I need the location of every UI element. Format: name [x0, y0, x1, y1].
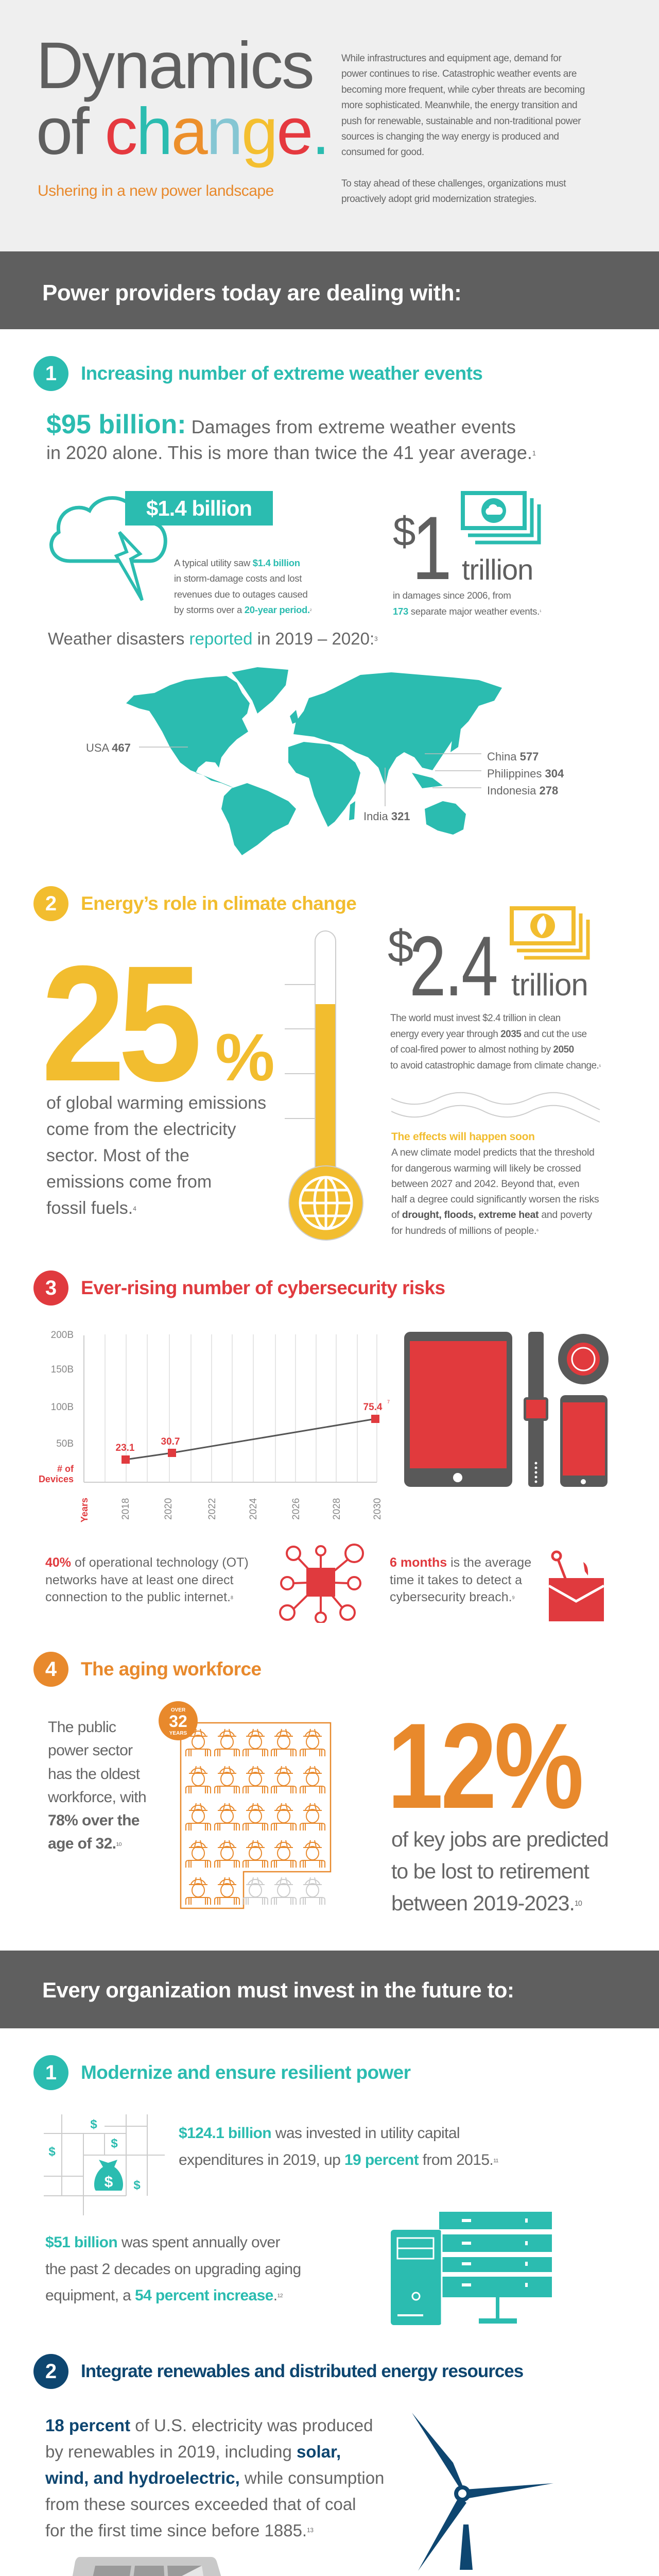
workforce grid: OVER: [171, 1707, 186, 1713]
section 1 heading: [33, 356, 482, 391]
text: $1 trillion detail: 173 separate major weather events.1: [393, 606, 541, 616]
icon: money grid: $: [105, 2174, 113, 2191]
banner: every organization: [0, 1951, 659, 2028]
text: 6 months: [390, 1555, 531, 1604]
icon: network: [279, 1544, 364, 1623]
line chart: connected devices: 100B: [51, 1402, 74, 1413]
workforce grid: YEARS: [169, 1731, 187, 1736]
workforce grid: [159, 1701, 332, 1909]
text: invest: of coal-fired power to almost nothing by 2050: [390, 1044, 574, 1055]
part 2 section 2 heading: Integrate renewables and distributed energy resources: [81, 2361, 523, 2381]
stat: $2.4 trillion: trillion: [511, 968, 588, 1002]
line chart: connected devices: 200B: [51, 1330, 74, 1341]
world map: [126, 667, 502, 855]
text: emissions: fossil fuels.4: [46, 1198, 136, 1218]
text: $51 billion: $51 billion was spent annually over: [45, 2234, 280, 2251]
text: 40% OT: [45, 1555, 249, 1604]
text: effects soon: half a degree could significantly worsen the risks: [391, 1194, 599, 1205]
text: invest: energy every year through 2035 and cut the use: [390, 1029, 587, 1040]
text: 18 percent: 18 percent of U.S. electricity was produced: [45, 2416, 373, 2435]
text: oldest workforce: 78% over the: [48, 1812, 140, 1829]
text: effects soon: [391, 1131, 599, 1236]
icon: thermometer: [285, 930, 363, 1241]
text: $124.1 billion: [179, 2125, 498, 2168]
stat: 25%: %: [215, 1020, 275, 1095]
section 3 heading: 3: [45, 1277, 57, 1299]
line chart: connected devices: 50B: [56, 1438, 74, 1449]
text: effects soon: of drought, floods, extreme heat and poverty: [391, 1209, 592, 1221]
text: effects soon: The effects will happen soon: [391, 1131, 535, 1143]
callout: $1.4 billion: [125, 491, 273, 526]
text: emissions: emissions come from: [46, 1172, 212, 1192]
text: key jobs: of key jobs are predicted: [391, 1827, 609, 1851]
text: effects soon: for dangerous warming will likely be crossed: [391, 1163, 581, 1174]
line chart: connected devices: 2028: [332, 1498, 342, 1520]
map labels: Asia: [487, 750, 564, 797]
section 4 heading: The aging workforce: [81, 1658, 261, 1680]
text: invest: The world must invest $2.4 trillion in clean: [390, 1013, 561, 1024]
text: key jobs: between 2019-2023.10: [391, 1891, 582, 1915]
stat: 25%: 25: [41, 931, 195, 1115]
text: emissions: sector. Most of the: [46, 1146, 189, 1165]
intro text: more sophisticated. Meanwhile, the energy transition and: [341, 100, 577, 111]
line chart: connected devices: 2024: [248, 1498, 259, 1520]
stat: 25%: [41, 931, 275, 1115]
icon: storm cloud: [49, 496, 167, 601]
text: 18 percent: [45, 2412, 384, 2544]
icon: phishing envelope: [549, 1551, 604, 1621]
map label: USA: USA 467: [86, 741, 131, 754]
line chart: connected devices: 7: [387, 1399, 390, 1404]
text: utility storm cost: revenues due to outages caused: [174, 589, 307, 600]
line chart: connected devices: 150B: [51, 1364, 74, 1375]
intro text: While infrastructures and equipment age, demand for: [341, 53, 561, 64]
section 3 heading: [33, 1270, 445, 1306]
text: utility storm cost: in storm-damage costs and lost: [174, 573, 302, 584]
icon: waves: [391, 1092, 600, 1123]
text: 6 months: time it takes to detect a: [390, 1572, 522, 1587]
section 3 heading: Ever-rising number of cybersecurity risks: [81, 1277, 445, 1298]
map labels: Asia: China 577: [487, 750, 539, 763]
$95 billion statement: [46, 410, 536, 463]
stat: $1 trillion: 1: [412, 498, 452, 599]
text: oldest workforce: age of 32.10: [48, 1835, 122, 1852]
icon: money grid: $: [111, 2137, 118, 2150]
line chart: connected devices: 75.4: [363, 1402, 383, 1413]
text: 40% OT: networks have at least one direct: [45, 1572, 233, 1587]
title: Dynamics: [36, 29, 313, 103]
line chart: connected devices: [39, 1330, 390, 1522]
text: 18 percent: from these sources exceeded that of coal: [45, 2495, 356, 2514]
text: $51 billion: equipment, a 54 percent increase.12: [45, 2287, 283, 2304]
map labels: Asia: Indonesia 278: [487, 784, 558, 797]
text: utility storm cost: [174, 557, 312, 615]
icon: money yellow: [510, 906, 590, 959]
intro text: [341, 53, 585, 158]
line chart: connected devices: 23.1: [116, 1443, 135, 1453]
stat: $2.4 trillion: [388, 919, 588, 1013]
text: utility storm cost: A typical utility saw $1.4 billion: [174, 557, 300, 568]
title: [36, 29, 328, 168]
text: oldest workforce: power sector: [48, 1742, 133, 1759]
section 2 heading: 2: [45, 892, 57, 915]
text: 18 percent: by renewables in 2019, including solar,: [45, 2442, 341, 2461]
workforce grid: 32: [169, 1712, 187, 1731]
text: 6 months: 6 months is the average: [390, 1555, 531, 1570]
icon: money grid: $: [48, 2145, 56, 2159]
stat: 12%: 12%: [387, 1698, 581, 1834]
line chart: connected devices: 2022: [207, 1498, 218, 1520]
text: 18 percent: wind, and hydroelectric, while consumption: [45, 2468, 384, 2487]
line chart: connected devices: 2020: [163, 1498, 174, 1520]
text: $124.1 billion: $124.1 billion was invested in utility capital: [179, 2125, 460, 2142]
icon: server: [391, 2212, 552, 2325]
stat: $2.4 trillion: 2.4: [409, 919, 497, 1013]
intro text 2: [341, 178, 566, 205]
icon: money grid: $: [133, 2178, 141, 2192]
text: invest: [390, 1013, 601, 1071]
text: effects soon: A new climate model predicts that the threshold: [391, 1147, 595, 1158]
text: emissions: come from the electricity: [46, 1120, 236, 1139]
text: $51 billion: [45, 2234, 301, 2304]
text: $51 billion: the past 2 decades on upgrading aging: [45, 2261, 301, 2277]
line chart: connected devices: Devices: [39, 1474, 74, 1484]
title: of change.: [36, 95, 328, 168]
text: oldest workforce: The public: [48, 1719, 116, 1736]
icon: money teal: [461, 491, 541, 544]
intro text: sources is changing the way energy is produced and: [341, 131, 559, 142]
callout: $1.4 billion: $1.4 billion: [146, 496, 252, 520]
section 2 heading: [33, 886, 356, 921]
text: emissions: of global warming emissions: [46, 1093, 266, 1113]
section 2 heading: Energy’s role in climate change: [81, 893, 356, 914]
intro text: becoming more frequent, while cyber threats are becoming: [341, 84, 585, 95]
text: oldest workforce: [48, 1719, 146, 1852]
map labels: Asia: Philippines 304: [487, 767, 564, 780]
line chart: connected devices: 2018: [120, 1498, 131, 1520]
line chart: connected devices: 2030: [372, 1498, 383, 1520]
part 2 section 1 heading: [33, 2055, 411, 2090]
intro text: consumed for good.: [341, 147, 424, 158]
line chart: connected devices: # of: [57, 1464, 74, 1474]
line chart: connected devices: 2026: [291, 1498, 302, 1520]
icon: money grid: [44, 2114, 165, 2215]
text: $124.1 billion: expenditures in 2019, up 19 percent from 2015.11: [179, 2151, 498, 2168]
text: key jobs: to be lost to retirement: [391, 1859, 589, 1883]
text: utility storm cost: by storms over a 20-year period.2: [174, 604, 311, 615]
part 2 section 1 heading: 1: [45, 2061, 57, 2084]
part 2 section 2 heading: [33, 2354, 626, 2389]
map heading: Weather disasters reported in 2019 – 2020:3: [48, 629, 378, 648]
$95 billion statement: $95 billion: Damages from extreme weather events: [46, 410, 516, 439]
intro text: power continues to rise. Catastrophic weather events are: [341, 69, 577, 79]
icon: wind turbine: [407, 2409, 561, 2573]
icon: devices: [404, 1332, 609, 1487]
subtitle: Ushering in a new power landscape: [38, 182, 274, 199]
$95 billion statement: in 2020 alone. This is more than twice the 41 year average.1: [46, 442, 536, 463]
section 1 heading: Increasing number of extreme weather events: [81, 363, 482, 384]
icon: money grid: $: [90, 2117, 97, 2131]
text: 40% OT: connection to the public internet.8: [45, 1590, 233, 1604]
banner: power providers: [0, 251, 659, 329]
text: oldest workforce: has the oldest: [48, 1766, 140, 1783]
stat: $1 trillion: [393, 498, 533, 599]
banner: every organization: Every organization must invest in the future to:: [42, 1978, 514, 2002]
text: $1 trillion detail: in damages since 2006, from: [393, 590, 511, 601]
text: invest: to avoid catastrophic damage from climate change.5: [390, 1060, 601, 1071]
text: 6 months: cybersecurity breach.9: [390, 1590, 514, 1604]
text: oldest workforce: workforce, with: [48, 1789, 146, 1806]
text: effects soon: for hundreds of millions of people.6: [391, 1225, 539, 1236]
intro text: push for renewable, sustainable and non-traditional power: [341, 116, 581, 127]
text: 40% OT: 40% of operational technology (OT): [45, 1555, 249, 1570]
line chart: connected devices: Years: [79, 1498, 90, 1522]
part 2 section 2 heading: 2: [45, 2360, 57, 2383]
icon: solar panel: [57, 2555, 245, 2576]
banner: power providers: Power providers today are dealing with:: [42, 280, 461, 306]
intro text 2: To stay ahead of these challenges, organizations must: [341, 178, 566, 189]
stat: $1 trillion: $: [393, 509, 416, 554]
header background: [0, 0, 659, 251]
text: key jobs: [391, 1827, 609, 1915]
stat: $1 trillion: trillion: [462, 553, 533, 586]
line chart: connected devices: 30.7: [161, 1436, 180, 1447]
intro text 2: proactively adopt grid modernization strategies.: [341, 194, 536, 205]
section 1 heading: 1: [45, 362, 57, 385]
map label: India: India 321: [363, 810, 410, 823]
stat: $2.4 trillion: $: [388, 921, 413, 973]
section 4 heading: 4: [45, 1658, 57, 1681]
text: $1 trillion detail: [393, 590, 542, 617]
text: 18 percent: for the first time since before 1885.13: [45, 2521, 314, 2540]
text: effects soon: between 2027 and 2042. Beyond that, even: [391, 1178, 579, 1190]
text: emissions: [46, 1093, 266, 1218]
section 4 heading: [33, 1652, 261, 1687]
part 2 section 1 heading: Modernize and ensure resilient power: [81, 2062, 410, 2083]
